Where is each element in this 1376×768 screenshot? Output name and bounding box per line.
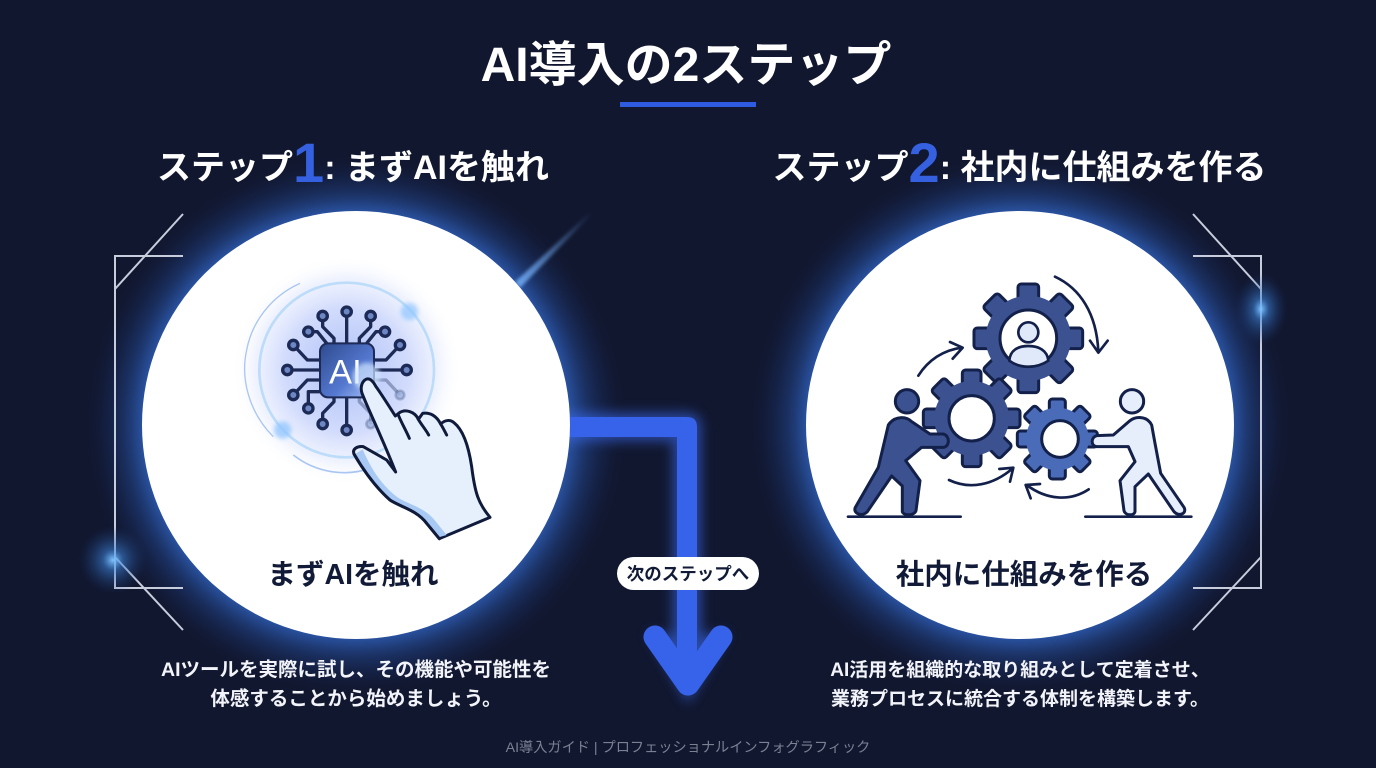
heading: step 2: ステップ <box>773 149 909 187</box>
circle label: 社内に仕組みを作る <box>896 559 1152 591</box>
gear: top <box>974 284 1083 393</box>
hand shading <box>356 449 447 537</box>
person: left <box>855 390 948 515</box>
circuit nodes <box>283 307 411 435</box>
person: right <box>1092 390 1185 515</box>
title: AI導入の2ステップ <box>481 39 891 92</box>
circle <box>142 211 570 639</box>
circle glow <box>84 153 628 697</box>
heading: step 2: : 社内に仕組みを作る <box>940 149 1266 187</box>
circle glow <box>748 153 1292 697</box>
chip highlight <box>353 363 381 391</box>
heading: step 1: : まずAIを触れ <box>324 149 549 187</box>
arrow head <box>655 637 721 684</box>
icon: AI chip touched by hand <box>232 255 490 539</box>
chip <box>320 343 374 397</box>
circuit traces <box>287 312 407 430</box>
panel: step 2 <box>748 153 1292 710</box>
panel: step 1 <box>79 153 628 710</box>
gear: right <box>1017 399 1097 479</box>
faded nodes <box>366 391 404 428</box>
ring sparks <box>401 303 418 320</box>
icon: people turning gears <box>848 277 1191 517</box>
light streak <box>515 212 592 288</box>
callout: next step: 次のステップへ <box>627 564 749 584</box>
description: 体感することから始めましょう。 <box>210 687 502 710</box>
frame spark <box>1235 273 1287 345</box>
arrow: to next step <box>560 417 721 695</box>
frame bracket <box>1193 214 1261 630</box>
heading: step 2: 2 <box>909 131 940 194</box>
circle label: まずAIを触れ <box>267 559 439 591</box>
description: AIツールを実際に試し、その機能や可能性を <box>161 659 551 681</box>
gear: left <box>923 370 1020 467</box>
frame bracket <box>115 214 183 630</box>
arrow line <box>570 417 697 680</box>
footer: AI導入ガイド | プロフェッショナルインフォグラフィック <box>506 740 870 756</box>
title underline <box>620 102 756 107</box>
circle <box>806 211 1234 639</box>
heading: step 1: 1 <box>293 131 324 194</box>
rings <box>245 283 434 473</box>
frame spark <box>79 526 147 594</box>
description: 業務プロセスに統合する体制を構築します。 <box>831 687 1209 710</box>
arrow glow <box>560 417 721 695</box>
heading: step 1: ステップ <box>157 149 293 187</box>
callout: next step <box>617 557 759 590</box>
hand <box>354 379 490 539</box>
description: AI活用を組織的な取り組みとして定着させ、 <box>830 660 1210 681</box>
chip label: AI <box>329 353 362 391</box>
finger creases <box>354 415 447 539</box>
person in gear <box>1018 322 1038 342</box>
rotation arrows <box>918 277 1108 498</box>
ground lines <box>848 513 1191 521</box>
chip glow <box>232 255 462 485</box>
